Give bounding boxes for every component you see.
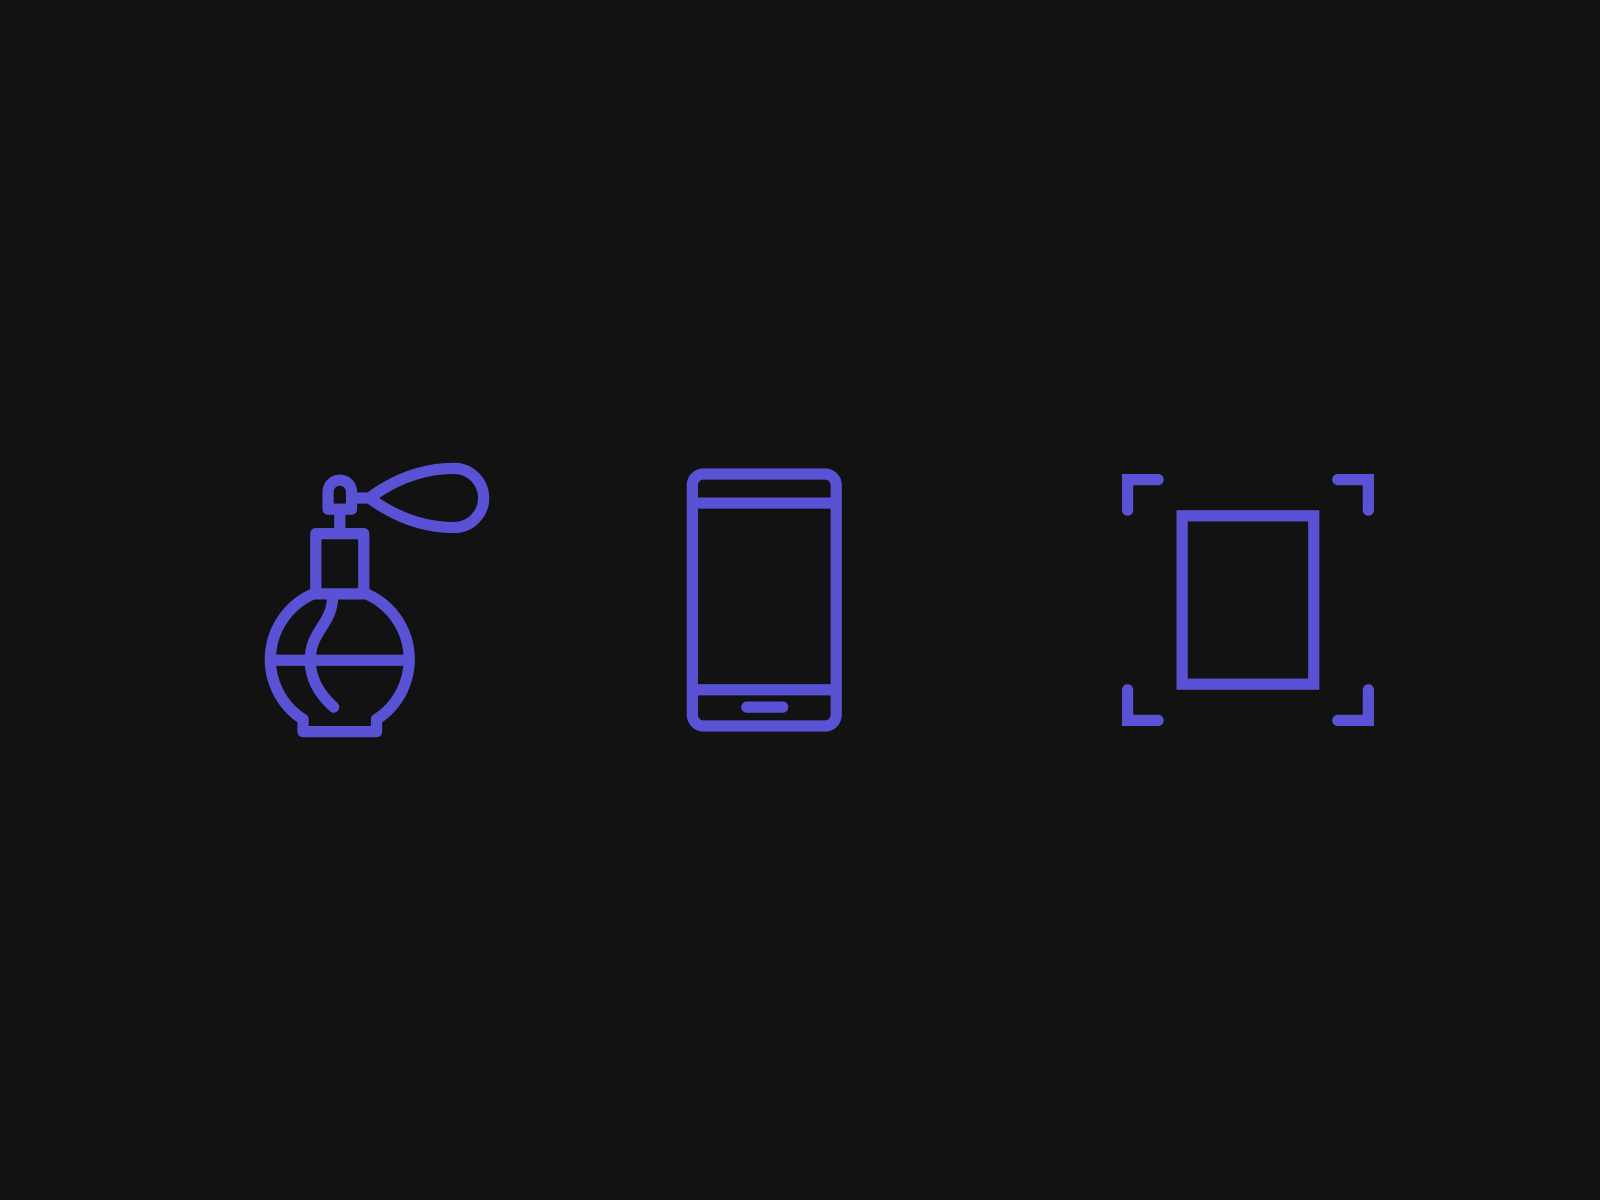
icon: perfume bottle	[269, 468, 484, 732]
icon: smartphone	[692, 474, 836, 726]
icon: frame / crop	[1128, 480, 1368, 720]
